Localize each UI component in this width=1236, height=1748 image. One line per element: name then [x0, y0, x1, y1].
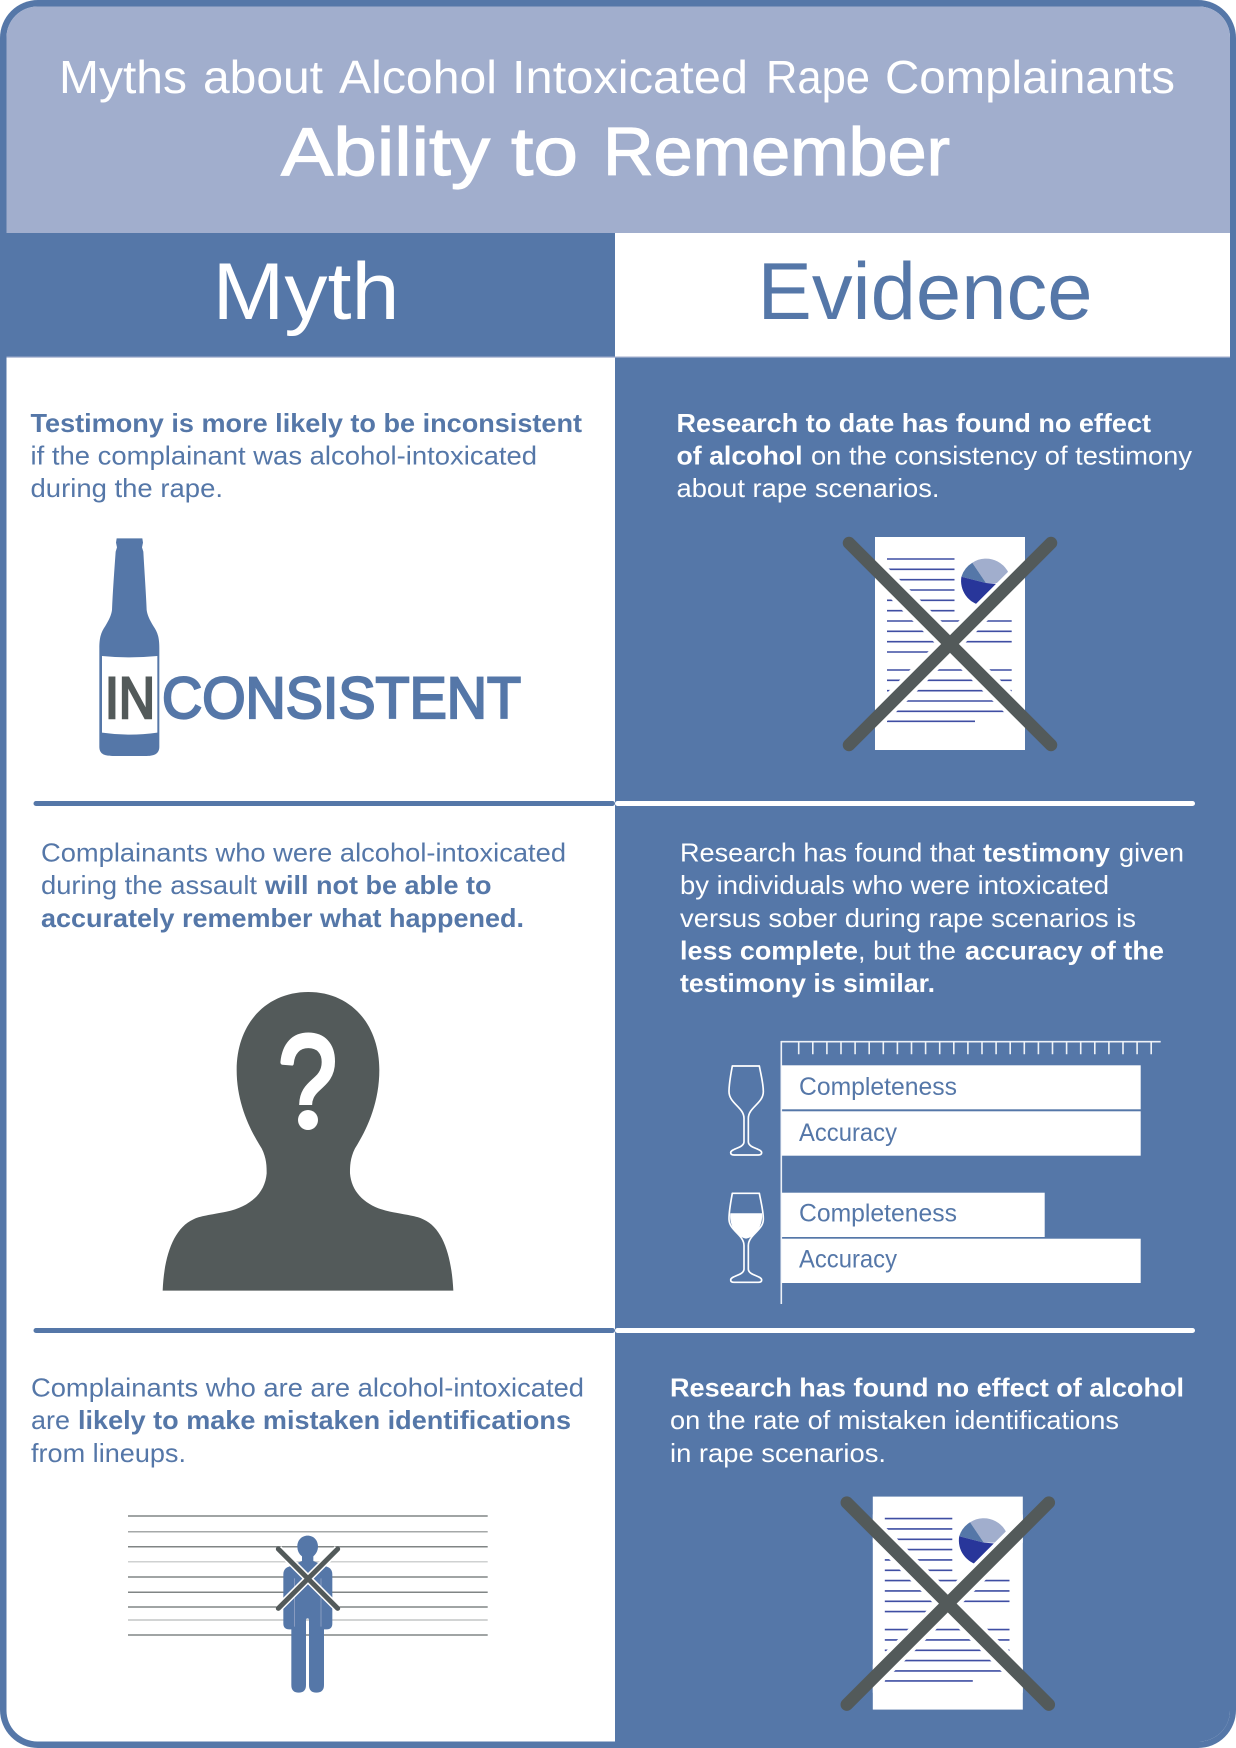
icon: crossed-out document 1 [849, 537, 1051, 750]
icon: bottle with INCONSISTENT word: CONSISTENT [162, 666, 521, 731]
evidence text 2: accuracy of the [965, 936, 1164, 966]
icon: filled wine glass [729, 1193, 763, 1282]
myth text 2 [41, 838, 566, 933]
evidence text 2: versus sober during rape scenarios is [680, 903, 1136, 933]
column header: Evidence [615, 233, 1230, 357]
bar: intoxicated completeness [782, 1193, 1045, 1237]
icon: silhouette with question mark: ? [278, 1007, 337, 1159]
myth text 2: will not be able to [264, 870, 492, 900]
evidence text 2 [680, 838, 1184, 998]
bar chart: completeness and accuracy [729, 1041, 1161, 1304]
subtitle [280, 125, 950, 190]
myth text 1: if the complainant was alcohol-intoxicated [30, 440, 537, 470]
myth text 3: from lineups. [31, 1438, 186, 1468]
icon: crossed-out document 2 [847, 1497, 1049, 1710]
column header: Myth [6, 233, 615, 357]
header banner [0, 0, 1236, 233]
evidence text 2: testimony is similar. [680, 968, 935, 998]
bar: sober completeness [782, 1065, 1141, 1109]
subtitle: Ability [281, 114, 490, 190]
icon: police lineup figure with cross [128, 1516, 488, 1693]
evidence text 3: Research has found no effect of alcohol [670, 1372, 1184, 1402]
bar: intoxicated accuracy [782, 1239, 1141, 1283]
evidence text 2: by individuals who were intoxicated [680, 870, 1109, 900]
myth text 2: accurately remember what happened. [41, 903, 524, 933]
evidence text 2: , but the [858, 936, 956, 966]
evidence text 1 [676, 408, 1192, 503]
myth text 3: Complainants who are are alcohol-intoxicated [31, 1372, 584, 1402]
evidence text 2: Research has found that [680, 838, 976, 868]
title line [62, 60, 1174, 102]
subtitle: Remember [603, 114, 950, 190]
title line: Alcohol [339, 51, 497, 103]
icon: bottle with INCONSISTENT word: IN [105, 666, 155, 731]
evidence text 1: about rape scenarios. [676, 473, 940, 503]
bar: intoxicated completeness: Completeness [799, 1199, 957, 1227]
title line: Myths [59, 51, 187, 103]
bar: sober completeness: Completeness [799, 1073, 957, 1101]
title line: about [203, 51, 323, 103]
evidence text 2: testimony [983, 838, 1111, 868]
evidence text 2: less complete [680, 936, 858, 966]
column header: Myth: Myth [212, 247, 400, 337]
myth text 2: Complainants who were alcohol-intoxicated [41, 838, 566, 868]
icon: empty wine glass [729, 1066, 763, 1155]
myth text 3 [31, 1372, 584, 1468]
myth text 1: during the rape. [30, 473, 223, 503]
divider row 1 [34, 801, 1195, 806]
evidence text 3: on the rate of mistaken identifications [670, 1405, 1119, 1435]
myth text 3: likely to make mistaken identifications [78, 1405, 571, 1435]
chart axis and ruler ticks [781, 1041, 1161, 1304]
evidence text 2: given [1119, 838, 1184, 868]
title line: Complainants [885, 51, 1175, 103]
evidence text 1: of alcohol [676, 440, 802, 470]
myth text 1: Testimony is more likely to be inconsistent [30, 408, 582, 438]
bar: intoxicated accuracy: Accuracy [799, 1246, 897, 1274]
divider row 2 [34, 1328, 1195, 1333]
icon: bottle with INCONSISTENT word [99, 538, 521, 756]
icon: silhouette with question mark [163, 992, 453, 1291]
evidence column background [6, 356, 1236, 1748]
bar: sober accuracy: Accuracy [799, 1119, 897, 1147]
evidence text 3 [670, 1372, 1184, 1468]
myth text 2: during the assault [41, 870, 258, 900]
myth text 1 [30, 408, 582, 503]
evidence text 1: on the consistency of testimony [811, 440, 1192, 470]
title line: Intoxicated [512, 51, 748, 103]
title line: Rape [766, 51, 870, 103]
column header: Evidence: Evidence [758, 247, 1092, 337]
bar: sober accuracy [782, 1111, 1141, 1156]
evidence text 3: in rape scenarios. [670, 1438, 886, 1468]
evidence text 1: Research to date has found no effect [676, 408, 1151, 438]
myth text 3: are [31, 1405, 70, 1435]
subtitle: to [511, 114, 578, 190]
